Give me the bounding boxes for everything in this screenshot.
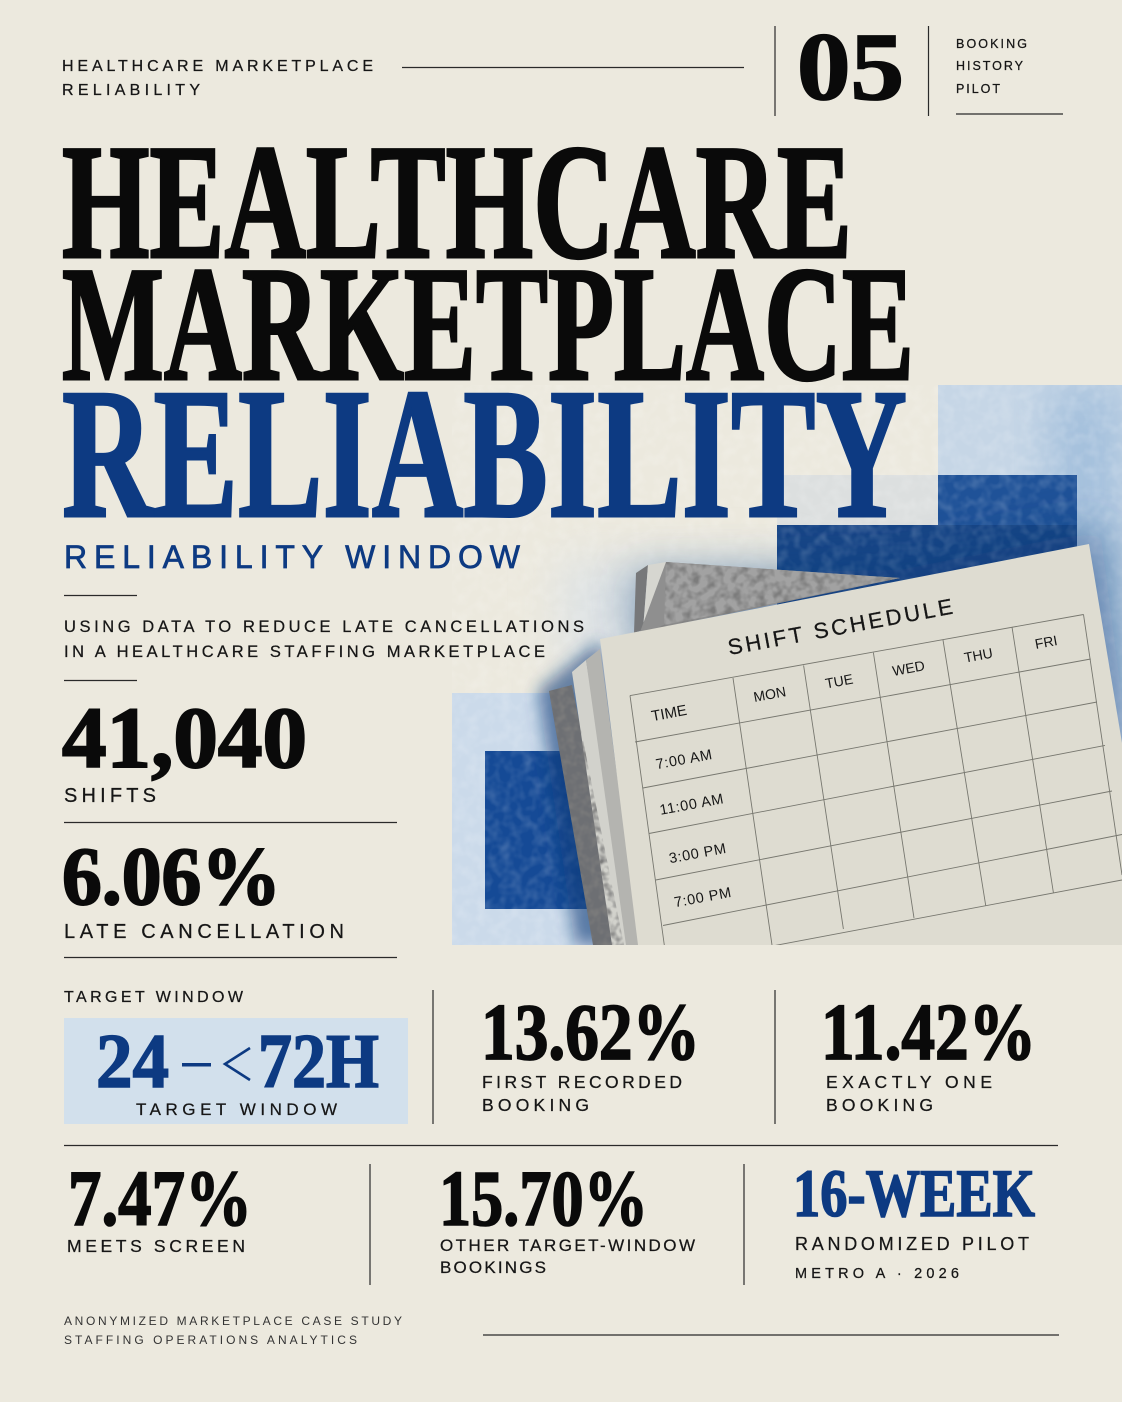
- stat: exactly one booking: BOOKING: [826, 1095, 933, 1115]
- day headers: TIME: [650, 702, 688, 725]
- target window callout: 72H: [258, 1018, 379, 1104]
- front sheet: shift schedule: [600, 544, 1122, 947]
- stat: meets screen: 7.47%: [68, 1156, 252, 1243]
- stat: first recorded booking: FIRST RECORDED: [482, 1072, 682, 1092]
- issue number: 05: [797, 13, 904, 120]
- description: [64, 618, 584, 661]
- header label: HEALTHCARE MARKETPLACE: [62, 58, 373, 75]
- time labels: 7:00 AM: [655, 747, 714, 773]
- stat: meets screen: MEETS SCREEN: [67, 1236, 245, 1256]
- day headers: WED: [891, 657, 926, 679]
- footer credit: ANONYMIZED MARKETPLACE CASE STUDY: [64, 1314, 402, 1328]
- description: USING DATA TO REDUCE LATE CANCELLATIONS: [64, 618, 584, 636]
- header label: [62, 58, 373, 99]
- stat: other target-window bookings: BOOKINGS: [440, 1258, 546, 1277]
- time labels: 7:00 PM: [673, 885, 733, 911]
- issue topic: HISTORY: [956, 59, 1024, 73]
- subtitle: RELIABILITY WINDOW: [64, 539, 521, 575]
- day headers: FRI: [1034, 632, 1059, 652]
- time labels: [655, 747, 733, 911]
- stat: 16-week pilot: RANDOMIZED PILOT: [795, 1234, 1029, 1254]
- stat: shifts: 41,040: [62, 689, 307, 786]
- header label: RELIABILITY: [62, 82, 200, 99]
- stat: 16-week pilot: [793, 1155, 1035, 1282]
- stat: exactly one booking: 11.42%: [821, 989, 1036, 1077]
- day headers: [650, 632, 1059, 725]
- issue topic: [956, 37, 1063, 114]
- day headers: MON: [752, 683, 787, 705]
- stat: late cancellation: LATE CANCELLATION: [64, 921, 344, 943]
- day headers: TUE: [824, 671, 854, 692]
- sheet title: SHIFT SCHEDULE: [726, 593, 958, 660]
- time labels: 3:00 PM: [668, 841, 728, 867]
- stat: first recorded booking: BOOKING: [482, 1095, 589, 1115]
- stat: other target-window bookings: 15.70%: [439, 1156, 648, 1243]
- back sheet stack: [540, 555, 910, 950]
- main title: [62, 112, 914, 557]
- time labels: 11:00 AM: [658, 791, 725, 819]
- issue topic: BOOKING: [956, 37, 1027, 51]
- day headers: THU: [963, 645, 994, 666]
- target window label: TARGET WINDOW: [64, 989, 244, 1006]
- stat: first recorded booking: 13.62%: [481, 989, 700, 1077]
- target window callout: TARGET WINDOW: [136, 1100, 337, 1119]
- stat: exactly one booking: [821, 989, 1036, 1115]
- stat: other target-window bookings: OTHER TARGET-WINDOW: [440, 1236, 695, 1255]
- description: IN A HEALTHCARE STAFFING MARKETPLACE: [64, 643, 545, 661]
- issue topic: PILOT: [956, 82, 1000, 96]
- stat: shifts: SHIFTS: [64, 785, 156, 807]
- stat: 16-week pilot: METRO A · 2026: [795, 1266, 959, 1282]
- footer credit: STAFFING OPERATIONS ANALYTICS: [64, 1333, 357, 1347]
- footer credit: [64, 1314, 402, 1347]
- schedule grid: [630, 614, 1122, 947]
- header rule: [402, 66, 744, 68]
- stat: first recorded booking: [481, 989, 700, 1115]
- illustration: schedule sheets on blue blocks: [452, 385, 1122, 950]
- target window callout: [64, 1018, 408, 1124]
- stat: late cancellation: [62, 830, 344, 943]
- stat: exactly one booking: EXACTLY ONE: [826, 1072, 992, 1092]
- stat: 16-week pilot: 16-WEEK: [793, 1155, 1035, 1231]
- target window callout: 24: [96, 1018, 169, 1104]
- stat: late cancellation: 6.06%: [62, 830, 281, 922]
